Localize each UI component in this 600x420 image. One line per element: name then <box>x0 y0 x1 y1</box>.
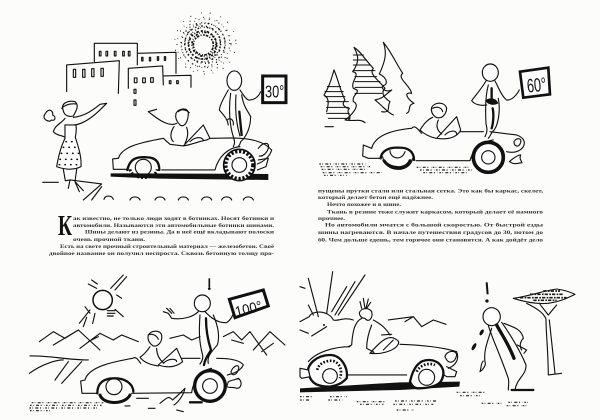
buildings <box>67 43 191 105</box>
sign: 100 degrees: 100° <box>234 299 264 321</box>
text column: right page: прочнее. <box>318 216 346 222</box>
text column: right page: 60. Чем дольше едешь, тем горячее они становятся. А как дойдёт дело <box>318 236 543 243</box>
text column: right page: шины нагреваются. В начале путешествия градусов до 30, потом до <box>318 230 543 236</box>
text column: right page: Ткань в резине тоже служит каркасом, который делает её намного <box>327 208 543 215</box>
mountains <box>39 330 285 355</box>
character: thermometer man <box>163 278 234 365</box>
character: thermometer man <box>472 64 519 138</box>
text column: right page: Нечто похожее и в шине. <box>327 202 402 208</box>
car with driver <box>363 103 524 172</box>
road markings <box>104 196 253 200</box>
panel: burst tyres scene with exhausted thermometer <box>300 272 575 410</box>
character: thermometer man <box>219 71 261 147</box>
text column: right page: Но автомобили мчатся с большой скоростью. От быстрой езды <box>325 222 544 229</box>
figure: woman waving with flowers <box>43 101 107 200</box>
sign: 30 degrees <box>263 76 286 103</box>
gravel road <box>319 164 473 175</box>
car with driver <box>81 331 243 402</box>
mountains <box>388 317 446 327</box>
paragraph text: Есть на свете прочный строительный материал — железобетон. Своё <box>60 243 275 250</box>
text column: right page <box>318 188 544 243</box>
road side strokes <box>29 356 88 383</box>
text column: right page: пущены прутки стали или стальная сетка. Это как бы каркас, скелет, <box>318 188 544 194</box>
sign: 60 degrees <box>520 68 550 98</box>
icon: blazing sun <box>79 275 127 327</box>
text column: left page <box>49 211 275 257</box>
sign: 60 degrees: 60° <box>526 75 547 98</box>
hatched and outlined fir trees <box>324 42 414 127</box>
icon: setting sun with rays <box>300 272 365 336</box>
sign: 100 degrees <box>229 290 268 321</box>
panel: city scene with 30 degree thermometer <box>43 13 286 200</box>
paragraph text: автомобили. Называются эти автомобильные ботинки шинами. <box>73 222 275 229</box>
drop cap: К <box>58 211 72 242</box>
car with driver <box>300 298 460 392</box>
paragraph text: Шины делают из резины. Да в неё ещё вкладывают полоски <box>85 230 275 236</box>
panel: forest scene with 60 degree thermometer <box>319 42 550 175</box>
paragraph text <box>49 215 275 257</box>
acacia tree <box>513 289 575 375</box>
text column: right page: который делает бетон ещё надёжнее. <box>318 194 434 201</box>
paragraph text: двойное название он получил неспроста. Сквозь бетонную толщу про- <box>49 250 274 257</box>
character: drooping thermometer man <box>471 282 533 390</box>
road and puddle <box>29 403 103 411</box>
sign: 30 degrees: 30° <box>265 81 284 101</box>
paragraph text: очень прочной ткани. <box>73 236 146 243</box>
icon: hazy sun <box>175 13 236 74</box>
car with driver <box>111 109 272 181</box>
paragraph text: ак известно, не только люди ходят в ботинках. Носят ботинки и <box>73 215 275 222</box>
panel: mountain scene with 100 degree thermometer <box>29 275 285 412</box>
gravel ground <box>300 392 530 410</box>
